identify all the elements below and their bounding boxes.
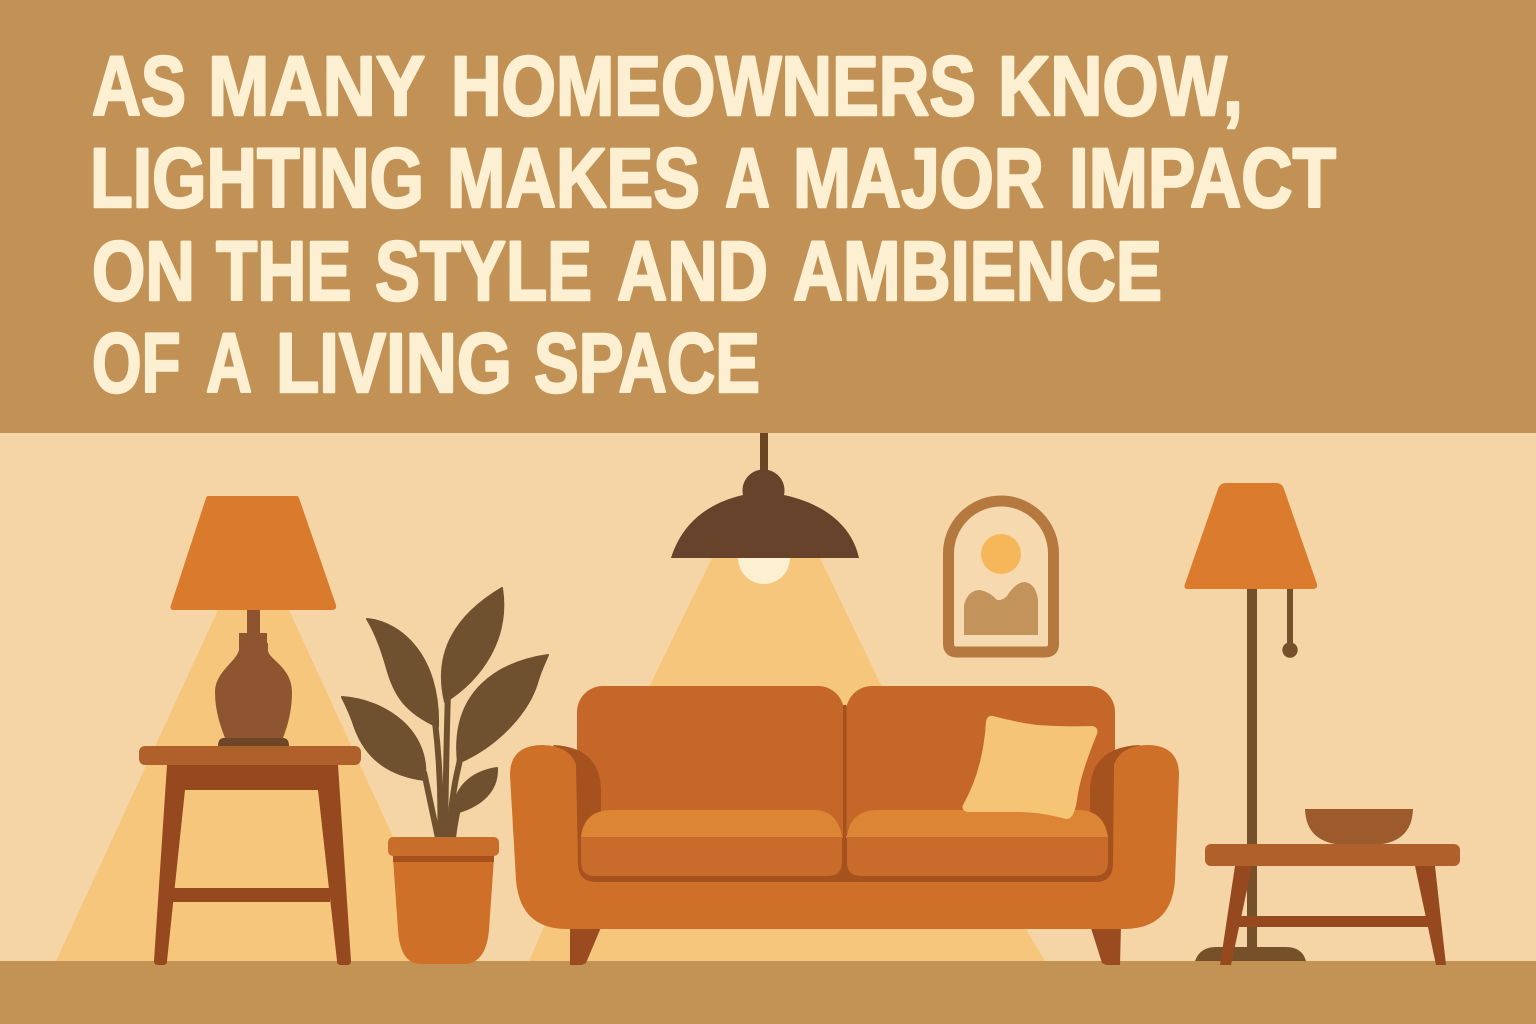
plant [342, 588, 548, 964]
title: ON [92, 224, 195, 318]
title: A [206, 316, 252, 410]
title: AS [92, 39, 186, 133]
table top [1205, 844, 1460, 866]
shade [1184, 483, 1317, 589]
cord [760, 433, 768, 475]
centre seam [843, 705, 846, 845]
header band [0, 0, 1536, 433]
title: MANY [208, 39, 425, 133]
lamp vase [215, 633, 292, 738]
right leg [1090, 925, 1121, 965]
lamp stem [247, 606, 260, 636]
seat cushion right [847, 810, 1108, 876]
pot rim [388, 837, 499, 856]
pot shadow [393, 856, 494, 862]
wall picture [948, 501, 1054, 652]
title: LIVING [276, 316, 512, 410]
side table [139, 746, 361, 965]
lamp shade [170, 496, 336, 610]
base [1195, 947, 1306, 961]
light cone: table lamp [56, 610, 450, 961]
back cushion right [846, 686, 1115, 856]
title: THE [216, 224, 352, 318]
stems [424, 690, 460, 838]
title: MAJOR [793, 131, 1044, 225]
floor lamp [1184, 483, 1317, 961]
title: OF [92, 316, 180, 410]
pendant lamp [671, 433, 859, 584]
pillow [963, 716, 1097, 819]
dome [671, 469, 859, 558]
sofa [510, 686, 1179, 965]
seat cushion left [581, 810, 842, 876]
title [90, 39, 1336, 410]
title: KNOW, [998, 39, 1243, 133]
pot body [393, 858, 494, 964]
sun [981, 534, 1021, 574]
title: A [725, 131, 770, 225]
title: HOMEOWNERS [451, 39, 976, 133]
right arm shadow [1090, 745, 1140, 845]
title: MAKES [447, 131, 700, 225]
seat well [577, 838, 1114, 883]
left arm shadow [553, 745, 601, 845]
leaves [342, 588, 548, 813]
legs [1220, 866, 1252, 965]
light cone: pendant [529, 558, 1045, 961]
table apron and legs [154, 765, 351, 965]
frame [948, 501, 1054, 652]
pull chain [1287, 589, 1293, 645]
title: AMBIENCE [793, 224, 1162, 318]
pole [1247, 585, 1257, 950]
table lamp [170, 496, 336, 746]
floor [0, 961, 1536, 1024]
title: SPACE [534, 316, 760, 410]
right table [1205, 809, 1460, 965]
title: IMPACT [1069, 131, 1336, 225]
cross bar [1238, 916, 1428, 927]
bulb [738, 556, 790, 584]
body and arms [510, 745, 1179, 929]
lamp plate [218, 738, 289, 746]
back cushion left [577, 686, 844, 856]
title: STYLE [375, 224, 592, 318]
bowl [1305, 809, 1413, 845]
hills [964, 582, 1038, 635]
title: AND [617, 224, 768, 318]
table top [139, 746, 361, 765]
cross bar [173, 888, 330, 902]
left leg [570, 925, 602, 965]
title: LIGHTING [90, 131, 424, 225]
